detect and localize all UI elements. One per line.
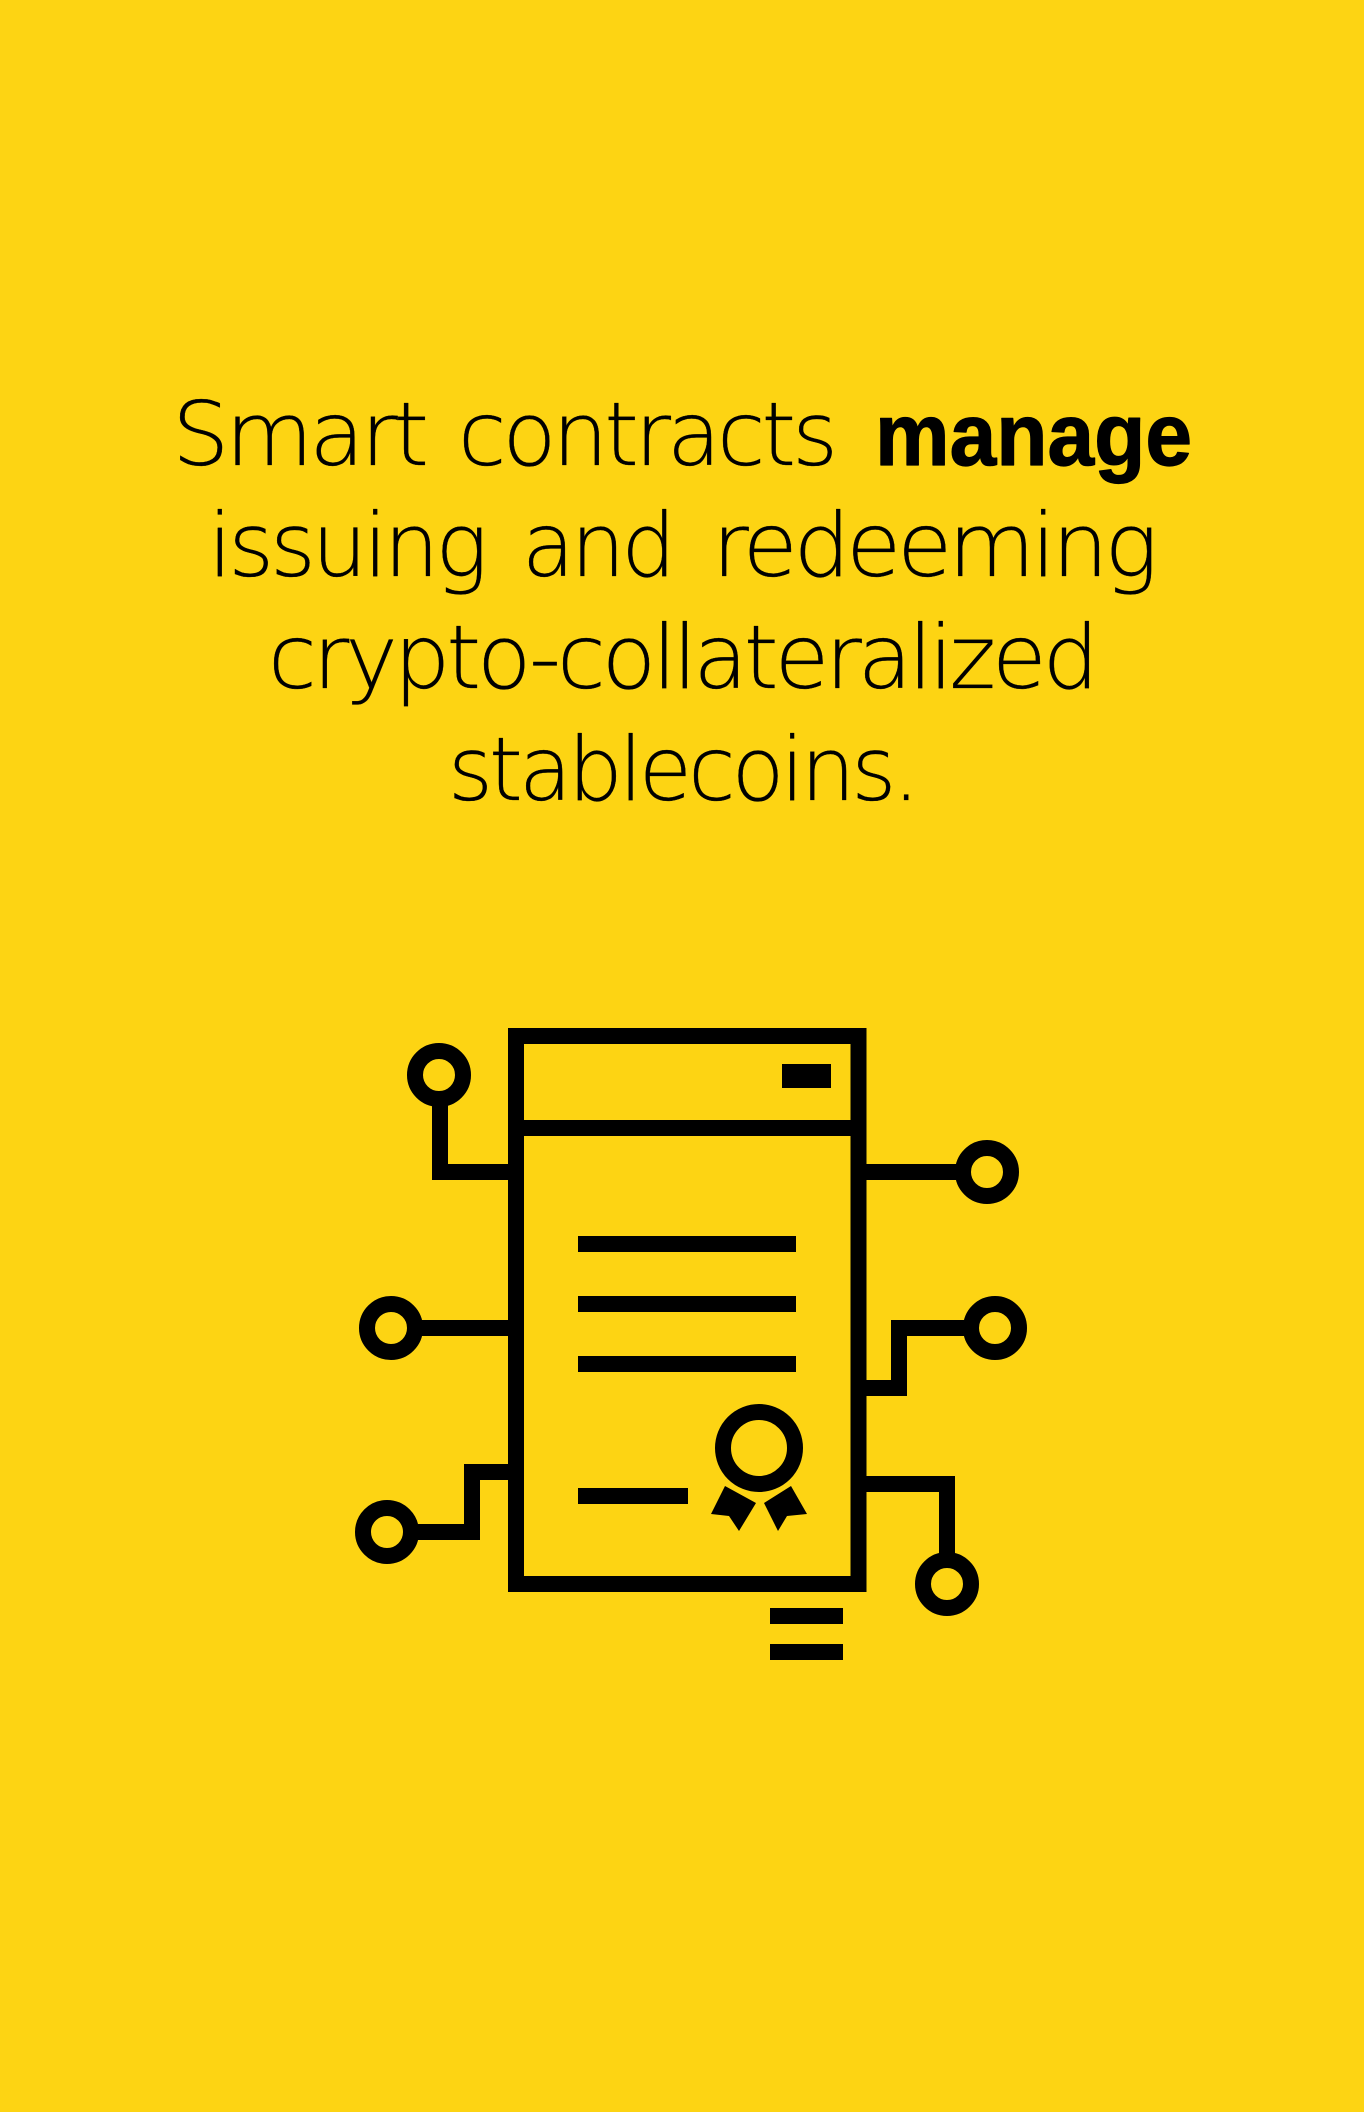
heading text: manage xyxy=(875,385,1192,484)
seal ribbons xyxy=(711,1486,807,1531)
heading text: crypto-collateralized xyxy=(268,606,1095,709)
node middle left xyxy=(367,1304,516,1352)
node middle right xyxy=(858,1304,1019,1388)
heading text: contracts xyxy=(458,383,834,486)
seal medal ring xyxy=(723,1412,795,1484)
heading text: Smart xyxy=(172,383,425,486)
icon: smart contract document with circuit nodes xyxy=(363,1036,1019,1652)
node bottom right xyxy=(858,1484,971,1608)
heading text: issuing xyxy=(208,494,484,597)
node top right xyxy=(858,1148,1011,1196)
heading text: redeeming xyxy=(712,494,1154,597)
heading text: and xyxy=(522,494,672,597)
heading text xyxy=(172,383,1192,821)
text lines xyxy=(578,1244,796,1496)
header tab xyxy=(782,1064,831,1088)
node top left xyxy=(415,1051,516,1172)
node bottom left xyxy=(363,1472,516,1556)
heading text: stablecoins. xyxy=(448,718,916,821)
marks below document xyxy=(770,1616,843,1652)
document outline xyxy=(516,1036,858,1584)
document header divider xyxy=(516,1120,858,1136)
